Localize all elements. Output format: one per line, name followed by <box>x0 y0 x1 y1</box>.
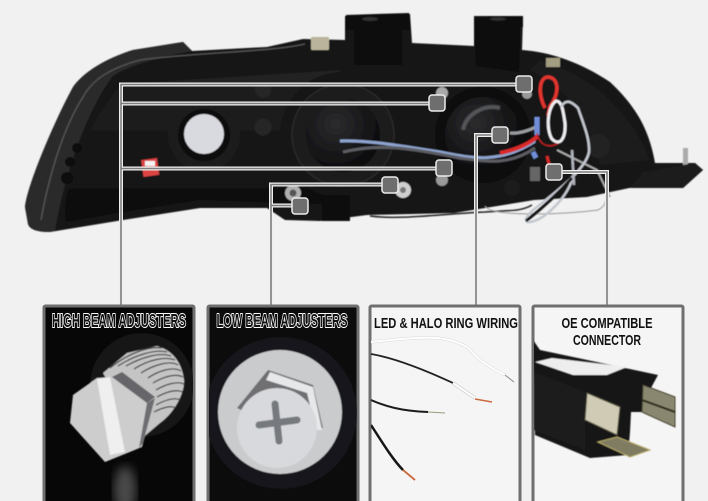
headlight assembly <box>25 13 703 232</box>
panel: LED and halo ring wiring <box>370 306 520 501</box>
central bulb housing <box>280 72 406 198</box>
small bolts left <box>61 143 82 184</box>
mounting tabs <box>346 13 410 65</box>
wiring bundle <box>500 77 610 222</box>
callout lines <box>121 84 607 305</box>
bottom thin wires <box>370 205 532 217</box>
high beam leader <box>121 84 524 305</box>
panel heading: CONNECTOR <box>573 332 641 349</box>
panel heading: LED & HALO RING WIRING <box>374 315 518 332</box>
outer flange <box>25 42 192 232</box>
low beam leader <box>271 184 390 305</box>
panel: low beam adjusters <box>205 306 358 501</box>
panel: OE compatible connector <box>533 306 683 501</box>
white lens socket <box>168 99 240 171</box>
blue and grey main wires <box>340 140 537 158</box>
icon: H4 connector <box>533 340 675 458</box>
wires <box>371 338 514 480</box>
red label <box>141 158 159 177</box>
right bulb housing <box>435 87 531 183</box>
lower details <box>322 195 350 221</box>
adjuster screws <box>285 185 301 201</box>
icon: phillips screw <box>205 337 357 489</box>
connector leader <box>554 172 607 305</box>
icon: slotted adjuster screw <box>70 333 194 501</box>
panel: high beam adjusters <box>44 306 194 501</box>
panel heading: LOW BEAM ADJUSTERS <box>216 311 348 331</box>
callout markers <box>292 76 562 214</box>
panel heading <box>562 315 652 349</box>
inner shaded housing <box>65 70 340 222</box>
panel heading: HIGH BEAM ADJUSTERS <box>52 311 186 331</box>
right arm <box>630 163 703 188</box>
metal clips <box>311 37 329 50</box>
housing body <box>25 14 703 232</box>
right pin <box>683 148 688 165</box>
panel heading: OE COMPATIBLE <box>562 315 652 332</box>
wiring leader <box>476 135 500 305</box>
